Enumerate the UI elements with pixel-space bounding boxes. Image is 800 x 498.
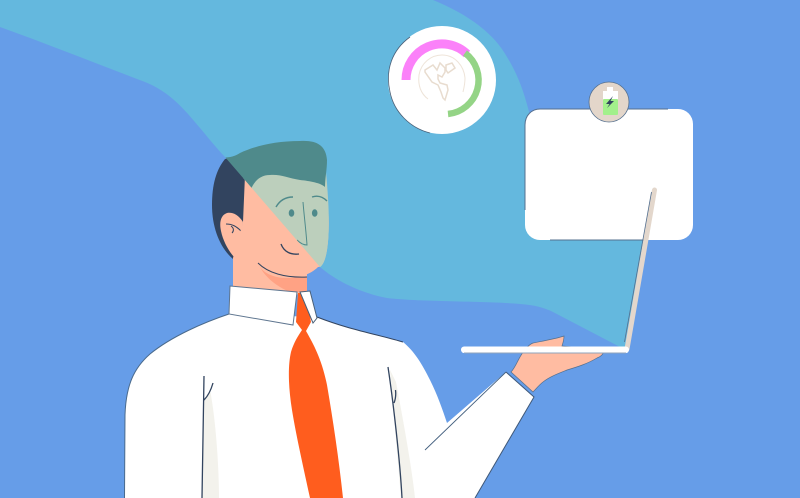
tinted hair — [222, 141, 327, 189]
pink arc — [406, 44, 467, 80]
lightning bolt — [606, 96, 614, 108]
left eye — [289, 209, 294, 217]
panel top edge — [525, 109, 668, 210]
right eyebrow — [312, 196, 327, 201]
left eyebrow — [276, 197, 293, 207]
globe outline — [419, 55, 465, 99]
neck — [233, 250, 307, 295]
globe gauge — [388, 26, 496, 134]
back hair — [212, 158, 252, 259]
ear detail — [226, 224, 241, 233]
shirt collar right — [300, 291, 317, 323]
nose — [297, 202, 307, 245]
right shirt fold shade — [390, 370, 415, 498]
battery badge — [589, 82, 629, 122]
hand — [511, 336, 605, 392]
laptop screen edge outline — [624, 192, 652, 342]
left shirt fold shade — [202, 390, 219, 498]
battery charge — [603, 99, 618, 115]
neck shadow — [258, 263, 307, 293]
disc shadow edge — [388, 37, 430, 133]
chin smile — [258, 263, 307, 277]
tie — [289, 293, 343, 498]
right shirt fold line — [388, 367, 402, 498]
sleeve cuff and lower edge — [475, 372, 534, 498]
shirt collar left — [229, 286, 297, 325]
man's head — [212, 158, 329, 295]
laptop base — [461, 346, 629, 353]
ear — [220, 213, 243, 258]
green arc — [448, 53, 479, 114]
laptop screen edge — [627, 190, 654, 349]
sleeve upper edge — [425, 372, 506, 450]
panel bottom edge — [550, 239, 646, 241]
shirt — [125, 314, 534, 498]
beam overlay on face — [222, 141, 329, 268]
mouth — [281, 244, 299, 254]
badge circle — [589, 82, 629, 122]
shirt outline right — [317, 317, 403, 342]
continents — [425, 63, 455, 100]
face — [233, 175, 329, 278]
laptop base shadow — [464, 352, 626, 354]
tinted face — [240, 172, 329, 268]
gauge disc — [388, 26, 496, 134]
light beam — [0, 0, 648, 347]
left shirt fold line — [202, 376, 213, 498]
battery top — [603, 87, 618, 101]
laptop screen panel — [525, 109, 693, 240]
right eye — [312, 209, 318, 217]
shirt outline left — [124, 314, 229, 498]
